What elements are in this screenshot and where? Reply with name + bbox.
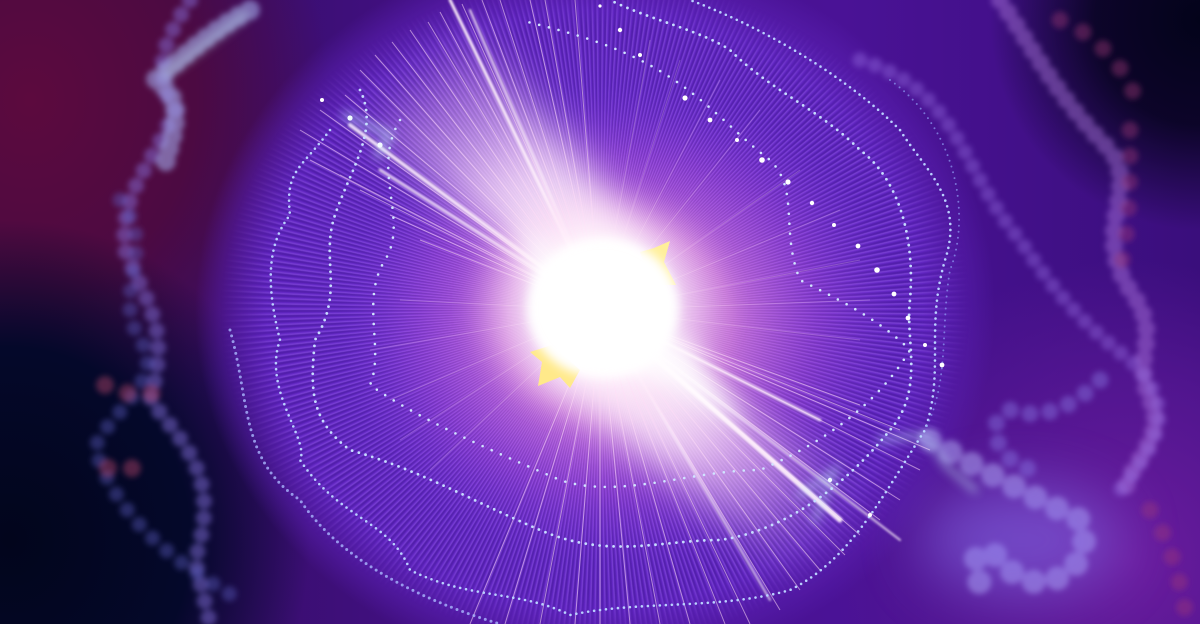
- bokeh strands: right: [860, 0, 1185, 610]
- inner dotted ring: [370, 20, 910, 487]
- middle dotted ring: [313, 0, 911, 547]
- glow: lower right cloud: [920, 485, 1120, 595]
- outermost faint ring: [230, 330, 500, 624]
- pink halo: [340, 85, 900, 565]
- blast over core: [510, 215, 745, 425]
- wavy dotted rings: [230, 0, 959, 624]
- core glow: [465, 185, 735, 425]
- core star: upper right tips: [640, 241, 676, 285]
- fine radial fibres: [239, 0, 952, 624]
- bright sparks: [320, 4, 944, 517]
- core star: lower left tips: [530, 345, 580, 388]
- white blast: diagonal haze: [360, 20, 900, 570]
- cyan highlights: [165, 15, 975, 520]
- outer dotted ring: [271, 0, 950, 615]
- bokeh strands: left: [95, 0, 250, 624]
- filaments: bright: [350, 0, 900, 600]
- core centre: [527, 238, 679, 378]
- filaments: soft bundle: [300, 0, 930, 624]
